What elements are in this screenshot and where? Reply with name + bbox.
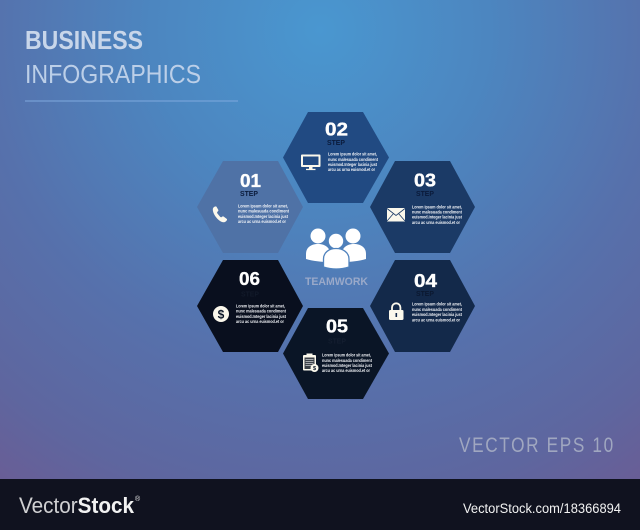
step label 02: STEP xyxy=(327,140,345,147)
number 03: 03 xyxy=(414,170,436,191)
body text 02: arcu ac urna euismod.et or xyxy=(328,167,375,172)
number 05: 05 xyxy=(326,316,348,337)
body text 04: Lorem ipsum dolor sit amet, xyxy=(412,302,462,306)
body text 05: nunc malesuada condiment xyxy=(322,358,372,363)
icon: clipboard with coin: $ xyxy=(313,366,316,372)
panel: step 03 xyxy=(370,161,475,253)
title line: business: BUSINESS xyxy=(25,25,143,55)
number 01: 01 xyxy=(240,170,261,191)
footer logo: VectorStock xyxy=(19,493,135,518)
body text 03: euismod.Integer lacinia just xyxy=(412,215,462,220)
number 06: 06 xyxy=(239,268,260,289)
body text 02: euismod.Integer lacinia just xyxy=(328,162,377,167)
body text 04: euismod.Integer lacinia just xyxy=(412,312,462,317)
icon: teamwork people xyxy=(306,228,366,269)
hexagon 03 xyxy=(370,161,475,253)
body text 06: euismod.Integer lacinia just xyxy=(236,314,286,319)
body text 03: Lorem ipsum dolor sit amet, xyxy=(412,204,462,209)
body text 06 xyxy=(236,304,286,324)
body text 02: Lorem ipsum dolor sit amet, xyxy=(328,152,377,157)
body text 04: nunc malesuada condiment xyxy=(412,307,462,312)
panel: step 01 xyxy=(197,161,303,253)
hexagon 06 xyxy=(197,260,303,352)
step label 06: STEP xyxy=(241,292,259,299)
hexagon 05 xyxy=(283,308,389,399)
step label 01: STEP xyxy=(240,191,258,198)
hexagon 02 xyxy=(283,112,389,203)
body text 02 xyxy=(328,152,378,172)
body text 05: arcu ac urna euismod.et or xyxy=(322,368,370,373)
body text 01: Lorem ipsum dolor sit amet, xyxy=(238,204,288,208)
icon: envelope xyxy=(387,208,405,222)
icon: dollar coin: $ xyxy=(218,308,225,322)
registered mark: ® xyxy=(135,495,141,503)
panel: step 04 xyxy=(370,260,475,352)
body text 02: nunc malesuada condiment xyxy=(328,157,378,162)
icon: phone xyxy=(213,206,227,222)
body text 05: Lorem ipsum dolor sit amet, xyxy=(322,353,371,358)
step label 04: STEP xyxy=(416,291,434,298)
body text 01: euismod.Integer lacinia just xyxy=(238,214,288,219)
body text 05: euismod.Integer lacinia just xyxy=(322,363,372,368)
hexagon 04 xyxy=(370,260,475,352)
number 02: 02 xyxy=(325,119,348,140)
hexagon 01 xyxy=(197,161,303,253)
body text 06: nunc malesuada condiment xyxy=(236,309,286,314)
title line: infographics: INFOGRAPHICS xyxy=(25,59,201,89)
body text 01: arcu ac urna euismod.et or xyxy=(238,219,286,224)
body text 04 xyxy=(412,302,462,322)
title xyxy=(25,25,238,102)
footer bar xyxy=(0,479,640,530)
body text 04: arcu ac urna euismod.et or xyxy=(412,317,460,322)
panel: step 06 xyxy=(197,260,303,352)
panel: step 05 xyxy=(283,308,389,399)
body text 01 xyxy=(238,204,289,224)
teamwork label: TEAMWORK xyxy=(305,276,368,288)
body text 03 xyxy=(412,204,462,225)
body text 03: nunc malesuada condiment xyxy=(412,210,462,214)
body text 06: arcu ac urna euismod.et or xyxy=(236,319,284,324)
body text 06: Lorem ipsum dolor sit amet, xyxy=(236,304,285,308)
panel: step 02 xyxy=(283,112,389,203)
icon: padlock xyxy=(389,303,404,320)
number 04: 04 xyxy=(414,270,438,291)
step label 05: STEP xyxy=(328,339,346,346)
footer url: VectorStock.com/18366894 xyxy=(463,501,621,516)
step label 03: STEP xyxy=(416,191,434,198)
icon: monitor xyxy=(301,154,320,170)
body text 01: nunc malesuada condiment xyxy=(238,209,289,214)
body text 03: arcu ac urna euismod.et or xyxy=(412,220,460,225)
caption: vector eps 10: VECTOR EPS 10 xyxy=(459,435,613,457)
body text 05 xyxy=(322,353,372,373)
